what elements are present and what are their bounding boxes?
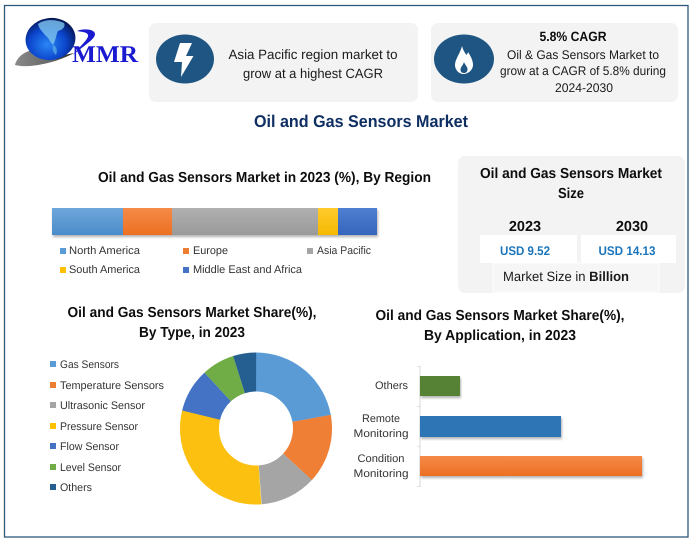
callout text [500, 29, 666, 95]
legend: region: South America [69, 264, 141, 276]
legend: type [50, 359, 164, 494]
logo: MMR globe: MMR [72, 42, 139, 68]
value: 2030: 2030 [616, 219, 648, 235]
stacked bar chart: region [52, 208, 377, 235]
legend: type: Ultrasonic Sensor [60, 400, 145, 412]
axis labels: Remote [362, 413, 400, 425]
legend: type: Gas Sensors [60, 359, 119, 371]
bar chart: application [354, 366, 642, 486]
callout text: Oil & Gas Sensors Market to [507, 48, 659, 62]
heading: application chart: By Application, in 2023 [424, 328, 576, 344]
legend: type: Temperature Sensors [60, 380, 164, 392]
unit note [493, 263, 659, 292]
donut chart: type [176, 349, 336, 508]
heading: application chart: Oil and Gas Sensors Market Share(%), [376, 308, 624, 324]
legend: region: Middle East and Africa [193, 264, 303, 276]
axis labels [354, 380, 408, 480]
value: 2023 [480, 219, 577, 263]
axis labels: Monitoring [354, 468, 408, 480]
panel: Asia Pacific callout [149, 23, 418, 102]
legend: region: Europe [193, 245, 228, 257]
value: 2023: 2023 [509, 219, 541, 235]
callout text: grow at a highest CAGR [243, 66, 383, 81]
heading: type chart: By Type, in 2023 [139, 325, 245, 341]
axis labels: Condition [358, 453, 404, 465]
icon: lightning bolt [156, 34, 214, 84]
value: 2023: USD 9.52 [500, 244, 550, 258]
bar: Remote Monitoring [420, 416, 561, 437]
legend: type: Pressure Sensor [60, 421, 138, 433]
legend: region: North America [69, 245, 141, 257]
panel: market size [458, 156, 685, 293]
axis labels: Others [375, 380, 408, 392]
callout text: grow at a CAGR of 5.8% during [500, 64, 666, 78]
legend: region [60, 245, 371, 276]
heading: market size: Oil and Gas Sensors Market [480, 166, 662, 182]
title: Oil and Gas Sensors Market [254, 112, 468, 131]
legend: type: Others [60, 482, 92, 494]
logo: MMR globe [15, 15, 139, 68]
legend: region: Asia Pacific [317, 245, 371, 257]
value: 2030: USD 14.13 [598, 244, 656, 258]
axis labels: Monitoring [354, 428, 408, 440]
bar: Others [420, 376, 460, 396]
heading: market size: Size [558, 186, 584, 202]
callout text: 5.8% CAGR [540, 29, 607, 44]
panel: CAGR callout [431, 23, 678, 102]
legend: type: Flow Sensor [60, 441, 119, 453]
heading: region chart: Oil and Gas Sensors Market in 2023 (%), By Region [98, 170, 431, 186]
callout text: Asia Pacific region market to [228, 47, 398, 62]
heading: type chart: Oil and Gas Sensors Market Share(%), [68, 305, 316, 321]
value: 2030 [581, 219, 676, 263]
legend: type: Level Sensor [60, 462, 121, 474]
unit note: Market Size in Billion [503, 269, 629, 284]
icon: flame [434, 34, 494, 84]
callout text: 2024-2030 [555, 81, 613, 95]
bar: Condition Monitoring [420, 456, 642, 476]
